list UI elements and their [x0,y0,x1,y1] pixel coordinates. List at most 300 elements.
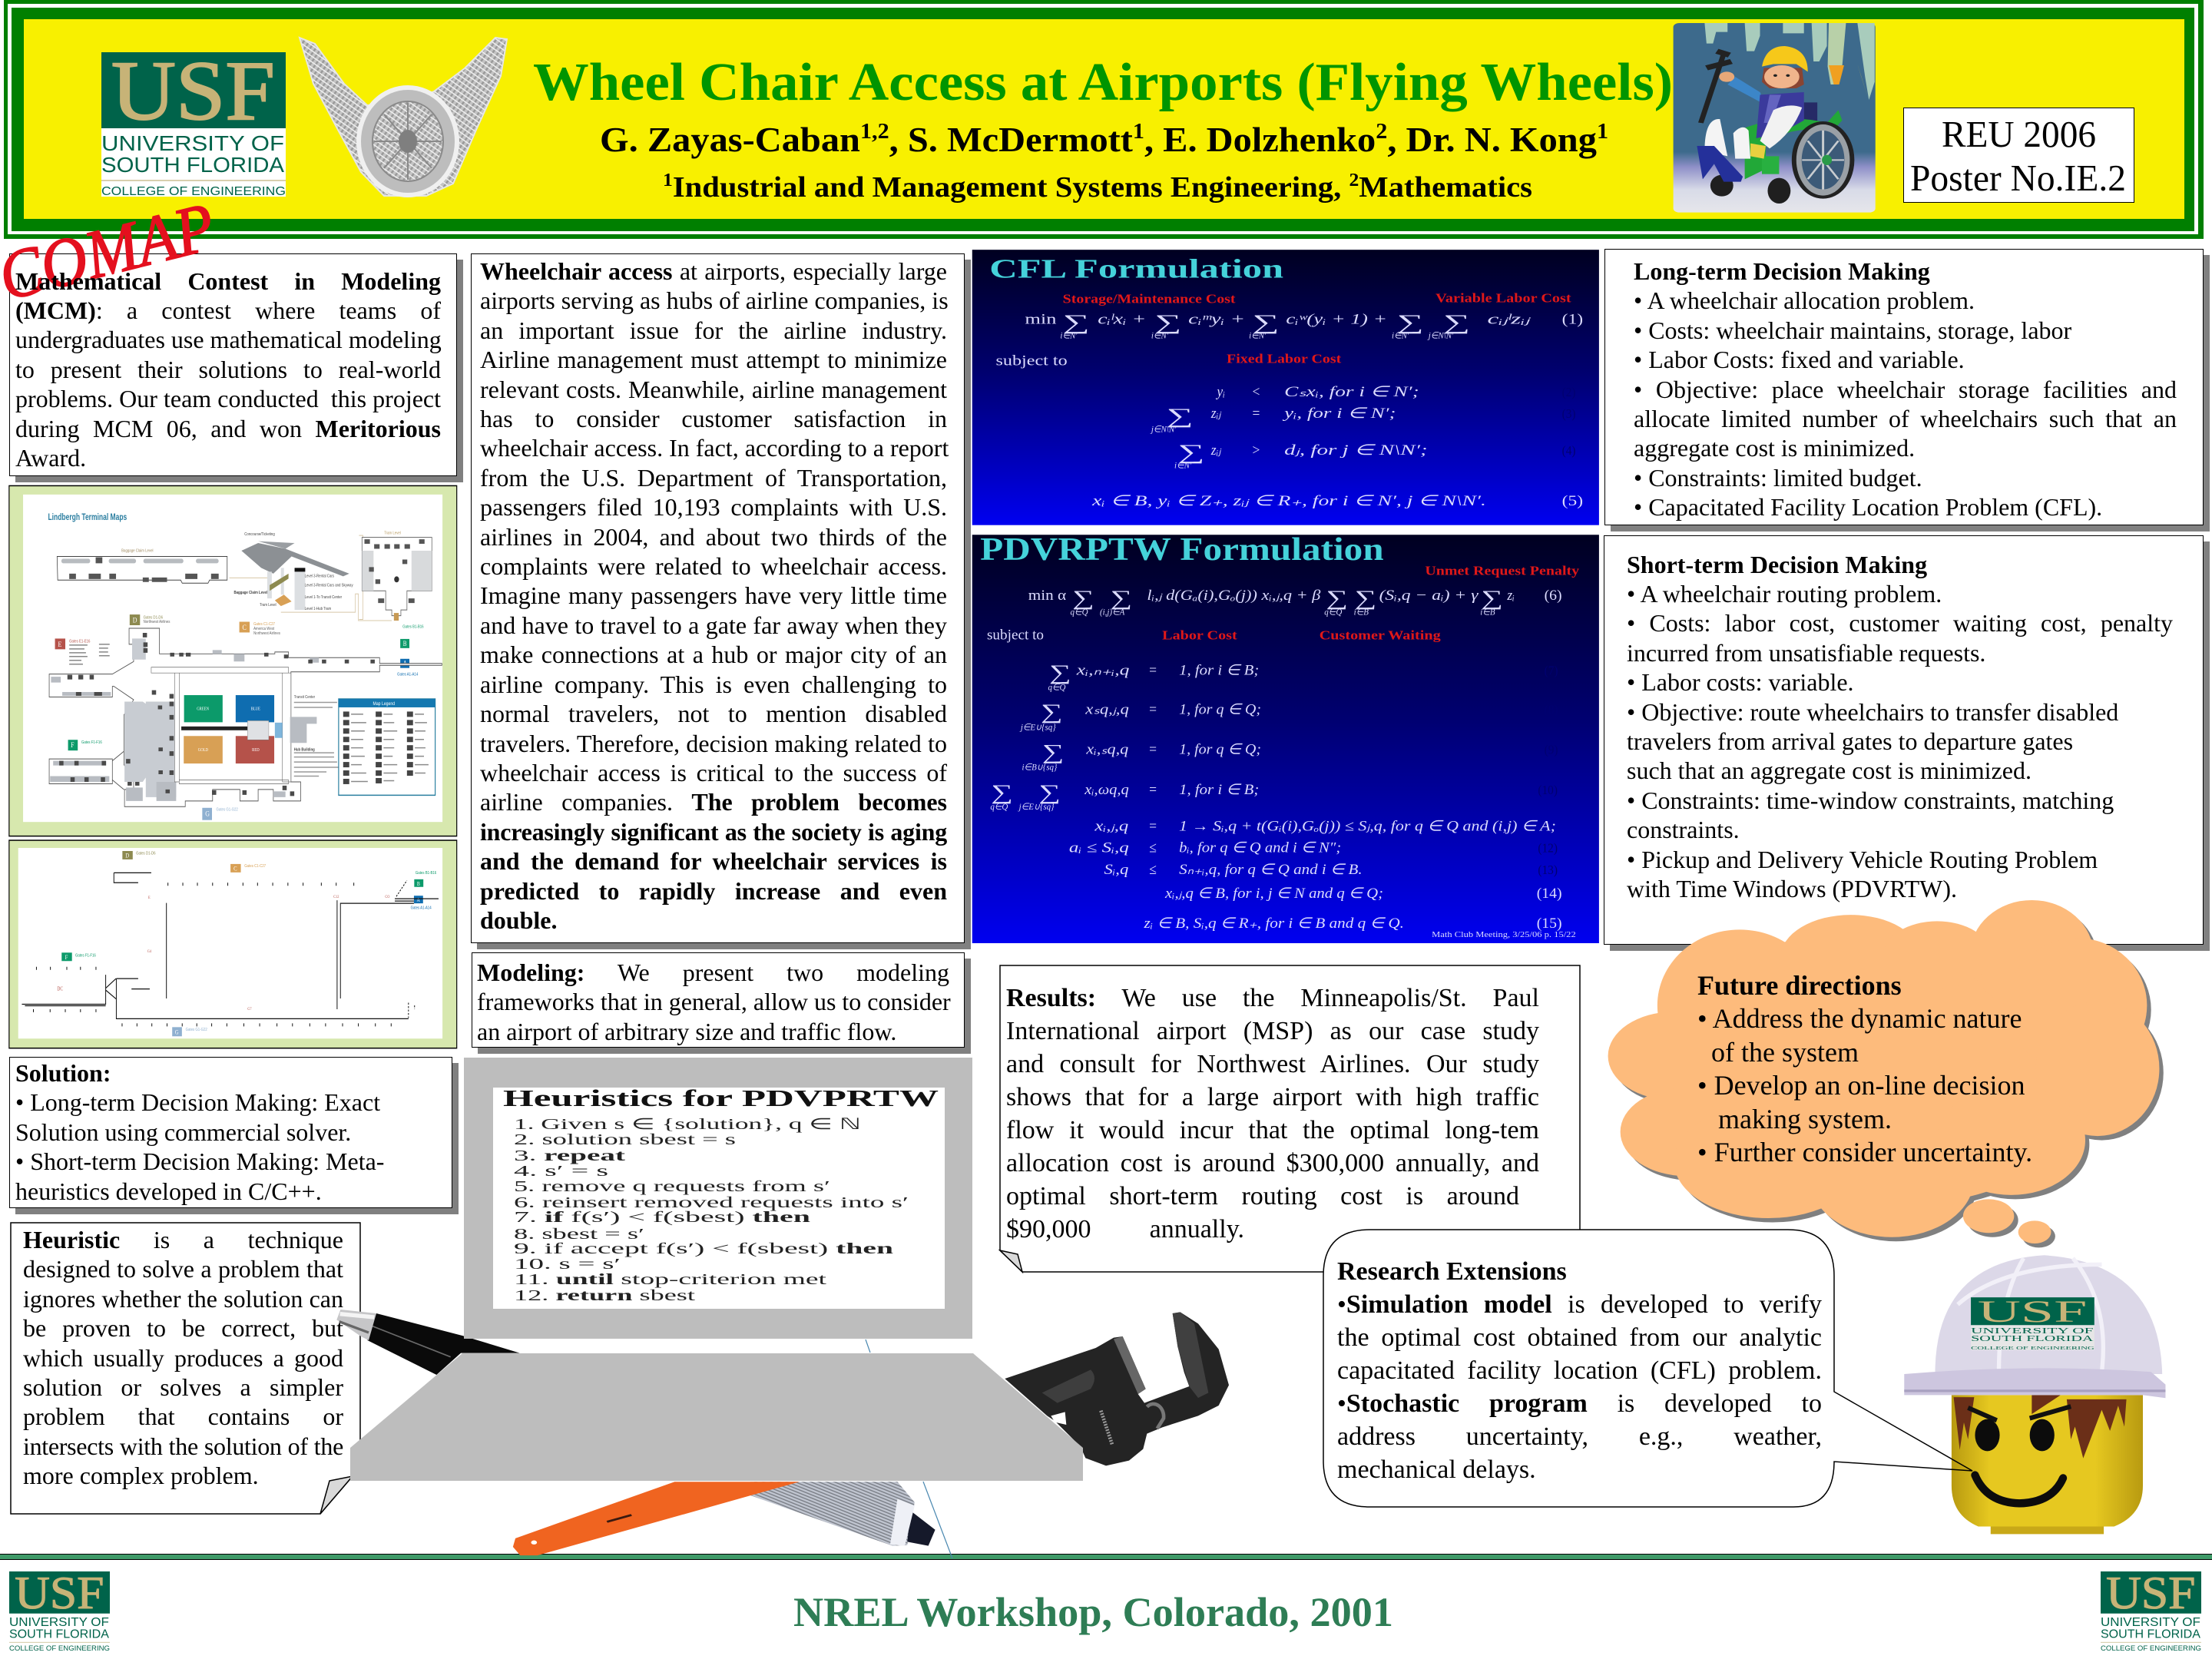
algorithm listing: 9. if accept f(s′) < f(sbest) then [514,1240,893,1257]
slide: PDVRPTW formulation: lᵢ,ⱼ d(Gₐ(i),Gₒ(j)) xᵢ,ⱼ,q + β [1147,587,1321,604]
text: short-term list: • Objective: route wheelchairs to transfer disabled [1627,698,2118,726]
speech bubble outline [1323,1230,1834,1507]
text: results: flow it would incur that the optimal long-tem [1006,1116,1539,1144]
text: wheelchair access background [480,257,949,934]
logo: USF College of Engineering: UNIVERSITY OF [101,131,284,155]
slide: CFL formulation: Cₛxᵢ, for i ∈ N′; [1284,383,1419,399]
slide: PDVRPTW formulation: ∑ [1481,585,1503,610]
text: results: and consult for Northwest Airlines. Our study [1006,1050,1539,1078]
logo on hard hat: SOUTH FLORIDA [1971,1335,2094,1343]
slide: CFL formulation: ∑ [1443,310,1470,334]
slide: PDVRPTW formulation: q∈Q [1324,608,1343,618]
slide: PDVRPTW formulation: 1, for i ∈ B; [1179,662,1259,678]
text: short-term list: • Pickup and Delivery Vehicle Routing Problem [1627,846,2098,873]
slide: PDVRPTW formulation: ∑ [1041,699,1063,724]
text: solution list: heuristics developed in C/C++. [15,1177,322,1205]
panel: terminal map: Map Legend [373,702,395,707]
panel: terminal map: Hub Building [294,747,315,753]
slide: PDVRPTW formulation: (10) [1538,783,1558,797]
text: results: Results: We use the Minneapolis/St. Paul [1006,984,1539,1012]
text: short-term list: • Labor costs: variable. [1627,668,1854,696]
authors: G. Zayas-Caban [600,121,842,159]
slide: CFL formulation: (5) [1562,492,1583,509]
text: long-term list: • Capacitated Facility Location Problem (CFL). [1634,493,2102,521]
panel: simplified network map: Gates D1-D6 [136,851,156,856]
footer logo right: USF [2106,1568,2195,1619]
panel: terminal map: A [403,660,407,667]
slide: PDVRPTW formulation: (14) [1537,886,1562,902]
text: long-term list: • Constraints: limited budget. [1634,464,1922,492]
footer logo left: UNIVERSITY OF [9,1616,109,1629]
slide: PDVRPTW formulation: i∈B∪{sq} [1022,763,1058,773]
panel: simplified network map: Gates F1-F16 [75,953,96,959]
poster number text: Poster No.IE.2 [1910,157,2126,199]
slide: CFL formulation: i∈N′ [1151,331,1169,340]
text: short-term list: constraints. [1627,816,1740,843]
text: long-term list: • A wheelchair allocation problem. [1634,286,1975,314]
logo: USF College of Engineering [101,44,286,198]
panel: simplified network map [9,840,457,1048]
slide: PDVRPTW formulation: Labor Cost [1162,629,1238,643]
text: long-term list: • Objective: place wheelchair storage facilities and [1634,376,2177,403]
panel: terminal map: Baggage Claim Level [121,548,153,554]
text: results: optimal short-term routing cost is around [1006,1182,1519,1210]
slide: PDVRPTW formulation: = [1149,741,1157,757]
text: wheelchair access background: predicted to rapidly increase and even [480,877,947,905]
text: modeling: an airport of arbitrary size and traffic flow. [477,1018,896,1045]
slide: CFL formulation: i∈N′ [1392,331,1409,340]
slide: PDVRPTW formulation: (7) [1545,664,1558,678]
footer logo left [9,1571,110,1651]
slide: PDVRPTW formulation: (8) [1545,704,1558,717]
text: wheelchair access background: has to consider customer satisfaction in [480,405,947,432]
authors: 1 [1597,120,1608,144]
slide: PDVRPTW formulation: ∑ [1049,660,1071,684]
panel: simplified network map: G4 [147,950,152,954]
text: wheelchair access background: increasingly significant as the society is aging [480,818,947,846]
text: heuristic definition: Heuristic is a technique [23,1226,343,1253]
panel: simplified network map: Gates A1-A14 [411,906,432,911]
slide: PDVRPTW formulation: 1, for i ∈ B; [1179,781,1259,797]
text: MCM description: (MCM): a contest where teams of [15,296,441,324]
footer logo right: SOUTH FLORIDA [2101,1628,2201,1641]
algorithm listing: 5. remove q requests from s′ [514,1178,830,1195]
poster number text [1910,113,2126,199]
algorithm listing: 6. reinsert removed requests into s′ [514,1194,909,1211]
text: future directions [1697,969,2189,1169]
slide: PDVRPTW formulation: zᵢ ∈ B, Sᵢ,q ∈ R₊, for i ∈ B and q ∈ Q. [1143,916,1404,931]
slide: PDVRPTW formulation: (15) [1537,916,1562,932]
text: wheelchair access background: airlines in 2004, and about two thirds of the [480,523,947,551]
slide: CFL formulation: cᵢˡxᵢ + [1098,311,1146,327]
text: heuristic definition: solution or solves a simpler [23,1373,343,1401]
slide: PDVRPTW formulation: aᵢ ≤ Sᵢ,q [1069,839,1129,855]
panel: simplified network map: G [175,1028,179,1035]
slide: PDVRPTW formulation: ∑ [1111,585,1132,610]
legend [339,699,435,795]
panel: terminal map: Tram Level [384,531,401,536]
text: wheelchair access background: Airline management must attempt to minimize [480,346,947,373]
panel: long-term decision making [1604,249,2210,531]
callout: heuristic box outline [10,1222,361,1515]
algorithm listing: 12. return sbest [514,1287,696,1304]
panel: terminal map: G [205,810,210,818]
text: modeling: Modeling: We present two modeling [477,959,949,986]
text: long-term list [1634,257,2177,521]
head [1762,68,1804,88]
text: heuristic definition [23,1226,343,1489]
text: research extensions: capacitated facility location (CFL) problem. [1337,1356,1822,1385]
slide: CFL formulation: Fixed Labor Cost [1227,353,1342,366]
affiliations: Mathematics [1359,171,1532,204]
text: short-term list: incurred from unsatisfiable requests. [1627,639,1985,667]
logo on hard hat: UNIVERSITY OF [1971,1327,2093,1336]
panel: terminal map: Level 3-Rental Cars and Skyway [305,583,353,588]
header banner frame [4,0,2204,239]
panel: terminal map: RED [252,748,260,753]
slide: CFL formulation: subject to [995,353,1068,369]
text: heuristic definition: designed to solve a problem that [23,1255,343,1283]
text: long-term list: allocate limited number of wheelchairs such that an [1634,405,2177,432]
panel: simplified network map: A [416,898,420,903]
panel: simplified network map: Gates C1-C27 [244,863,266,869]
slide: CFL formulation [972,250,1599,943]
text: wheelchair access background: Imagine many passengers have very little time [480,581,947,609]
panel: terminal map: Level 3-Rental Cars [305,574,334,579]
algorithm listing: 4. s′ = s [514,1163,608,1180]
slide: PDVRPTW formulation: ≤ [1149,861,1157,877]
text: future directions: • Address the dynamic nature [1697,1003,2022,1034]
footer text: NREL Workshop, Colorado, 2001 [793,1589,1393,1635]
slide: CFL formulation: dⱼ, for j ∈ N\N′; [1284,442,1428,458]
affiliations: Industrial and Management Systems Engineering, [673,171,1349,204]
panel: simplified network map: E [148,896,151,900]
algorithm listing: 11. until stop-criterion met [514,1271,827,1288]
text: solution list: • Long-term Decision Making: Exact [15,1088,380,1116]
text: heuristic definition: more complex problem. [23,1462,259,1489]
slide: PDVRPTW formulation: ≤ [1149,839,1157,855]
slide: CFL formulation: xᵢ ∈ B, yᵢ ∈ Z₊, zᵢⱼ ∈ R₊, for i ∈ N′, j ∈ N\N′. [1091,492,1486,508]
slide: CFL formulation: (4) [1562,444,1576,458]
text: short-term list: • Constraints: time-window constraints, matching [1627,786,2114,814]
text: heuristic definition: ignores whether the solution can [23,1285,343,1313]
text: solution list [15,1059,384,1205]
text: solution list: Solution using commercial solver. [15,1118,351,1146]
text: wheelchair access background: relevant costs. Meanwhile, airline management [480,376,947,403]
illustration: toy figure in wheelchair [1673,23,1876,213]
text: solution list: Solution: [15,1059,111,1087]
slide: PDVRPTW formulation: xₛq,ⱼ,q [1084,701,1129,717]
slide: PDVRPTW formulation: = [1149,818,1157,834]
slide: CFL formulation: cᵢʷ(yᵢ + 1) + [1286,311,1387,328]
text: heuristic definition: be proven to be correct, but [23,1314,343,1342]
panel: terminal map: Gates C1-C27 [253,622,275,627]
panel: terminal map: D [133,616,137,624]
text: heuristic definition: problem that contains or [23,1402,343,1430]
illustration: ballpoint pen [307,1290,538,1444]
illustration: silver pen end and orange saw bar [307,1045,1075,1582]
footer logo right: COLLEGE OF ENGINEERING [2101,1644,2201,1652]
text: wheelchair access background: wheelchair access. In fact, according to a report [480,434,949,462]
slide: PDVRPTW formulation: xᵢ,ωq,q [1084,781,1129,797]
slide: PDVRPTW formulation: j∈E∪{sq} [1018,803,1055,812]
panel: terminal map: Gates G1-G22 [217,807,238,812]
text: future directions: Future directions [1697,970,1902,1001]
text: wheelchair access background: and have to travel to a gate far away when they [480,611,947,639]
panel: wheelchair access [471,253,971,949]
text: results [1006,982,1539,1246]
text: future directions: making system. [1718,1104,1892,1134]
algorithm listing: 3. repeat [514,1147,626,1164]
gate concourse blocks [184,695,223,722]
text: research extensions: the optimal cost obtained from our analytic [1337,1323,1822,1352]
panel: simplified network map: DC [57,986,63,992]
text: long-term list: • Labor Costs: fixed and variable. [1634,346,1965,373]
authors: , Dr. N. Kong [1387,121,1597,159]
text: research extensions: Research Extensions [1337,1257,1567,1286]
footer rule [0,1554,2212,1560]
slide: CFL formulation: ∑ [1253,310,1280,334]
text: wheelchair access background: make connections at a hub or major city of an [480,641,947,668]
footrests [1697,146,1743,182]
text: wheelchair access background: wheelchair access is critical to the success of [480,759,947,786]
slide: PDVRPTW formulation: (12) [1538,842,1558,855]
panel: terminal map: Transit Center [294,695,315,700]
text: future directions: of the system [1711,1037,1859,1068]
panel: terminal map: Baggage Claim Level [233,591,268,595]
slide: PDVRPTW formulation: 1 → Sᵢ,q + t(Gᵢ(i),Gₒ(j)) ≤ Sⱼ,q, for q ∈ Q and (i,j) ∈ A; [1179,818,1556,835]
text: research extensions: address uncertainty, e.g., weather, [1337,1422,1822,1451]
slide: CFL formulation: (2) [1562,386,1576,399]
slide: CFL formulation: ∑ [1063,310,1090,334]
logo: USF College of Engineering: COLLEGE OF ENGINEERING [101,185,286,198]
slide: PDVRPTW formulation: xᵢ,ⱼ,q ∈ B, for i, j ∈ N and q ∈ Q; [1164,886,1383,901]
text: short-term list: with Time Windows (PDVRTW). [1627,875,1957,902]
slide: PDVRPTW formulation: (i,j)∈A [1100,608,1125,618]
cloud: future directions [1567,883,2212,1267]
slide: CFL formulation: zᵢⱼ [1210,442,1222,458]
slide: PDVRPTW formulation: ∑ [991,780,1013,804]
panel: terminal map: Gates F1-F16 [81,740,102,745]
text: research extensions: •Simulation model is developed to verify [1337,1290,1822,1319]
footer logo right [2101,1571,2201,1651]
slide: CFL formulation: cᵢⱼˡzᵢⱼ [1488,311,1532,327]
logo on hard hat [1971,1294,2094,1351]
slide: PDVRPTW formulation: ∑ [1072,585,1094,610]
text: short-term list: • Costs: labor cost, customer waiting cost, penalty [1627,609,2173,637]
algorithm listing: 7. if f(s′) < f(sbest) then [514,1209,810,1226]
text: results: International airport (MSP) as our case study [1006,1017,1539,1045]
slide: PDVRPTW formulation: (13) [1538,864,1558,877]
panel: simplified network map: C12 [333,896,339,899]
icon: winged wheel [298,36,508,197]
slide: PDVRPTW formulation: ∑ [1038,780,1061,804]
panel: short-term decision making [1604,535,2204,945]
body [1757,92,1804,138]
text: future directions: • Develop an on-line decision [1697,1070,2025,1101]
panel: simplified network map: Gates B1-B16 [416,870,436,876]
text: MCM description: problems. Our team conducted this project [15,385,441,412]
slide: PDVRPTW formulation: Math Club Meeting, 3/25/06 p. 15/22 [1432,931,1576,939]
text: long-term list: • Costs: wheelchair maintains, storage, labor [1634,316,2071,344]
text: modeling [477,959,951,1045]
text: short-term list: Short-term Decision Making [1627,550,1927,578]
slide: PDVRPTW formulation: Sᵢ,q [1104,861,1128,877]
slide: CFL formulation: j∈N\N′ [1427,331,1454,340]
slide: CFL formulation: Storage/Maintenance Cost [1063,293,1236,306]
panel: terminal map: Gates E1-E16 [69,639,91,644]
slide: PDVRPTW formulation: = [1149,662,1157,678]
text: wheelchair access background: normal travelers, not to mention disabled [480,700,947,727]
text: wheelchair access background: from the U.S. Department of Transportation, [480,464,947,492]
slide: PDVRPTW formulation: xᵢ,ₙ₊ᵢ,q [1075,662,1129,678]
text: heuristic definition: which usually produces a good [23,1344,343,1372]
gate tags [130,614,140,625]
algorithm listing: 8. sbest = s′ [514,1226,644,1243]
algorithm listing: 10. s = s′ [514,1256,621,1273]
poster number text: REU 2006 [1942,113,2096,155]
panel: terminal map: America West [253,627,275,631]
slide: PDVRPTW formulation: (Sᵢ,q − aᵢ) + γ [1379,587,1479,604]
cloud shape [1567,883,2212,1544]
affiliations: 2 [1349,171,1359,190]
panel: terminal map: B [403,640,406,647]
logo: USF College of Engineering: USF [111,44,275,137]
panel: modeling [472,952,971,1054]
authors: 1,2 [860,120,889,144]
text: short-term list: travelers from arrival gates to departure gates [1627,727,2073,755]
text: short-term list: • A wheelchair routing problem. [1627,580,1942,608]
slide: CFL formulation: Variable Labor Cost [1435,292,1571,306]
footer logo left: COLLEGE OF ENGINEERING [9,1644,110,1652]
text: MCM description: Mathematical Contest in Modeling [15,267,441,295]
panel: terminal map: Level 1-Hub Tram [305,607,331,611]
footer logo right: UNIVERSITY OF [2101,1616,2200,1629]
text: wheelchair access background: passengers filed 10,193 complaints with U.S. [480,493,947,521]
authors: 1 [1133,120,1144,144]
slide: PDVRPTW formulation: (9) [1545,743,1558,757]
illustration: pipe wrench [952,1290,1275,1521]
text: MCM description [15,267,442,472]
slide: PDVRPTW formulation: = [1149,701,1157,717]
text: results: shows that for a large airport with high traffic [1006,1083,1539,1111]
slide: PDVRPTW formulation: 1, for q ∈ Q; [1179,701,1261,717]
footer logo left: USF [15,1568,104,1619]
panel: terminal map [9,485,457,836]
results box outline [1000,965,1580,1273]
panel: simplified network map: G7 [247,1008,252,1012]
slide: CFL formulation: ∑ [1167,404,1194,428]
panel: simplified network map: CO [385,896,390,899]
slide: PDVRPTW formulation: (6) [1545,587,1562,604]
slide: PDVRPTW formulation: ∑ [1326,585,1348,610]
slide: CFL formulation: ∑ [1177,439,1205,464]
slide: CFL formulation: min [1025,311,1056,327]
wheelchair [1804,102,1817,123]
panel: terminal map: GREEN [197,707,209,712]
slide: PDVRPTW formulation: ∑ [1042,740,1064,763]
text: MCM description: to present their solutions to real-world [15,356,441,383]
text: MCM description: Award. [15,444,86,472]
panel: MCM contest [0,188,463,482]
slide: CFL formulation: i∈N′ [1249,331,1267,340]
panel: terminal map: Tram Level [260,603,276,608]
panel: terminal map: Northwest Airlines [144,620,171,624]
slide: PDVRPTW formulation [972,531,1599,943]
slide: CFL formulation: cᵢᵐyᵢ + [1188,311,1245,327]
panel: heuristics pseudocode [464,1058,972,1339]
authors: 2 [1376,120,1387,144]
text: wheelchair access background: an important issue for the airline industry. [480,316,947,344]
callout: research extensions [1323,1230,1834,1507]
algorithm listing: 2. solution sbest = s [514,1131,736,1148]
affiliations: 1 [663,171,673,190]
algorithm listing: 1. Given s ∈ {solution}, q ∈ ℕ [514,1116,861,1133]
slide: PDVRPTW formulation: q∈Q [1048,683,1066,692]
logo on hard hat: USF [1978,1294,2087,1329]
text: wheelchair access background: airports serving as hubs of airline companies, is [480,286,949,314]
illustration: lego head with hard hat [1567,883,2212,1544]
text: wheelchair access background: complaints were related to wheelchair access. [480,552,947,580]
slide: CFL formulation: = [1253,405,1260,421]
slide: CFL formulation: < [1253,383,1260,399]
panel: terminal map: Gates D1-D6 [144,615,163,621]
text: MCM description: during MCM 06, and won Meritorious [15,415,441,442]
algorithm listing [493,1088,945,1309]
slide: PDVRPTW formulation: i∈B [1354,608,1369,618]
panel: terminal map: Concourse/Ticketing [244,532,275,537]
logo on hard hat: COLLEGE OF ENGINEERING [1971,1346,2094,1351]
panel: terminal map: Lindbergh Terminal Maps [48,512,127,523]
slide: CFL formulation: yᵢ, for i ∈ N′; [1282,405,1396,421]
panel: terminal map: GOLD [198,748,208,753]
slide: PDVRPTW formulation: ∑ [1355,585,1376,610]
text: modeling: frameworks that in general, allow us to consider [477,988,951,1015]
slide: PDVRPTW formulation: xᵢ,ⱼ,q [1094,818,1128,834]
panel: terminal map: F [71,740,75,749]
text: research extensions [1337,1255,1822,1486]
slide: PDVRPTW formulation: xᵢ,ₛq,q [1085,741,1128,757]
slide: PDVRPTW formulation: Sₙ₊ᵢ,q, for q ∈ Q and i ∈ B. [1179,861,1363,877]
algorithm listing: Heuristics for PDVPRTW [503,1084,939,1111]
slide: CFL formulation: zᵢⱼ [1210,405,1222,421]
text: wheelchair access background: airline companies. The problem becomes [480,788,947,816]
panel: solution [9,1057,459,1214]
text: research extensions: •Stochastic program is developed to [1337,1389,1822,1418]
footer logo left: SOUTH FLORIDA [9,1628,110,1641]
slide: PDVRPTW formulation: min α [1028,587,1067,603]
slide: CFL formulation: i∈N′ [1060,331,1078,340]
text: results: allocation cost is around $300,000 annually, and [1006,1149,1539,1177]
poster number box [1903,108,2134,203]
panel: simplified network map: D [125,852,130,859]
panel: simplified network map: B [417,881,420,887]
panel: terminal map: Gates A1-A14 [397,672,418,677]
text: future directions: • Further consider uncertainty. [1697,1137,2032,1167]
slide: CFL formulation: yᵢ [1216,383,1225,399]
text: long-term list: Long-term Decision Making [1634,257,1930,285]
panel: simplified network map: Gates G1-G22 [186,1027,207,1032]
text: wheelchair access background: and the demand for wheelchair services is [480,847,947,875]
panel: terminal map: BLUE [251,707,261,712]
slide: CFL formulation: ∑ [1154,310,1181,334]
slide: CFL formulation: j∈N\N′ [1150,425,1177,435]
slide: PDVRPTW formulation: bᵢ, for q ∈ Q and i ∈ N″; [1179,839,1341,855]
slide: PDVRPTW formulation: zᵢ [1506,587,1515,603]
panel: terminal map: Gates B1-B16 [402,624,424,630]
authors [600,120,1608,159]
slide: PDVRPTW formulation: 1, for q ∈ Q; [1179,741,1261,757]
